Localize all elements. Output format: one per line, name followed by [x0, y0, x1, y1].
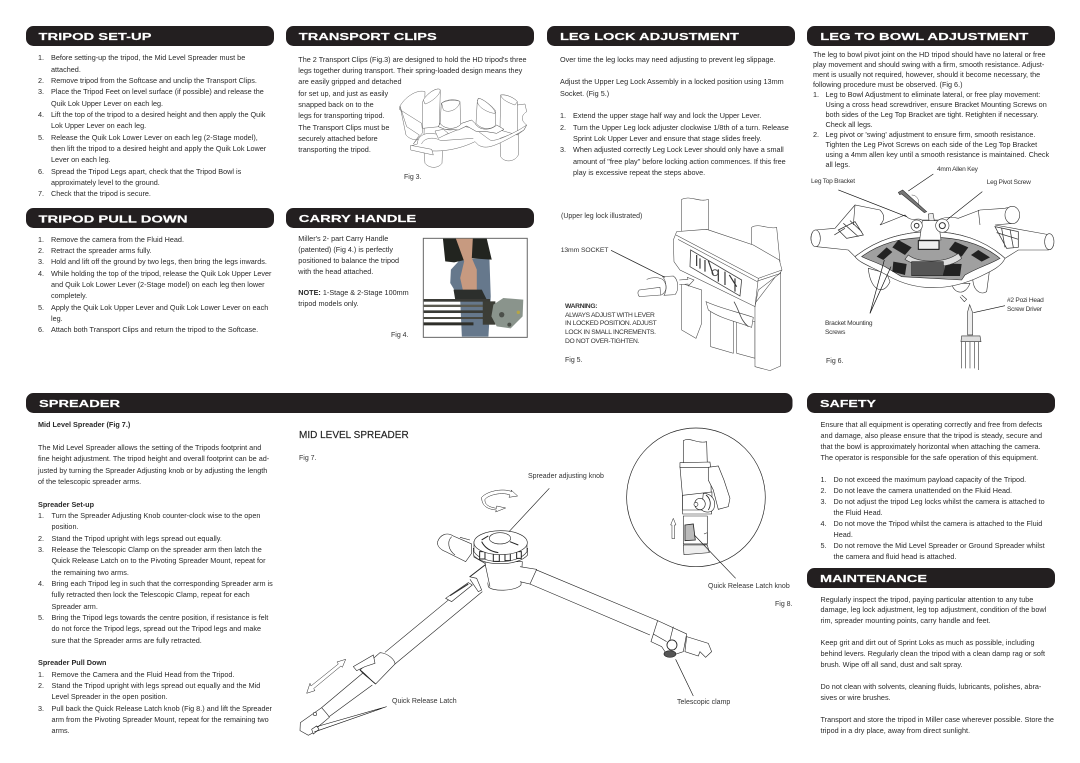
text block: leg lock adjustment steps: Socket. (Fig 5.) [560, 89, 609, 98]
text block: spreader instructions: Stand the Tripod upright with legs spread out equally. [52, 534, 222, 543]
text block: leg lock adjustment steps: When adjusted correctly Leg Lock Lever should only have a small [573, 145, 784, 154]
label: bracket mounting screws: Bracket Mounting [825, 320, 872, 326]
text block: tripod set-up steps: Place the Tripod Feet on level surface (if possible) and release the [51, 87, 264, 96]
text block: leg to bowl adjustment steps: following procedure must be observed. (Fig 6.) [813, 80, 963, 89]
text block: leg lock adjustment steps: amount of "free play" before locking action commences. If this free [573, 157, 786, 166]
text block: spreader instructions: Spreader arm. [52, 602, 98, 611]
text block: spreader instructions: 2. [38, 681, 44, 690]
text block: maintenance instructions: sives or wire brushes. [820, 693, 891, 702]
text block: tripod set-up steps: 6. [38, 167, 44, 176]
text block: tripod set-up steps: 1. [38, 53, 44, 62]
text block: tripod pull down steps: and Quik Lok Lower Lever (2-Stage model) on each leg then lower [51, 280, 265, 289]
text block: safety instructions: the camera and fluid head is attached. [834, 552, 956, 561]
text block: carry handle description: with the head attached. [298, 267, 373, 276]
heading: mid level spreader diagram title: MID LEVEL SPREADER [299, 430, 409, 440]
text block: maintenance instructions: Do not clean with solvents, cleaning fluids, lubricants, polishes, abra- [820, 682, 1041, 691]
label: 13mm socket: 13mm SOCKET [561, 247, 608, 254]
callout: warning: WARNING: [565, 303, 597, 310]
text block: spreader instructions: 2. [38, 534, 44, 543]
text block: leg lock adjustment steps: Turn the Upper Leg lock adjuster clockwise 1/8th of a turn. Release [573, 123, 789, 132]
text block: tripod pull down steps: completely. [51, 291, 87, 300]
text block: tripod set-up steps: Remove tripod from the Softcase and unclip the Transport Clips. [51, 76, 257, 85]
label: fig 6: Fig 6. [826, 358, 844, 365]
text block: spreader instructions [38, 420, 273, 735]
text block: maintenance instructions: Regularly inspect the tripod, paying particular attention to any tube [820, 594, 1033, 604]
text block: maintenance instructions: damage, leg lock adjustment, leg top adjustment, condition of the bowl [820, 605, 1046, 614]
text block: tripod set-up steps: 5. [38, 133, 44, 142]
text block: tripod set-up steps: Spread the Tripod Legs apart, check that the Tripod Bowl is [51, 167, 241, 176]
text block: spreader instructions: position. [52, 522, 79, 531]
text block: tripod pull down steps: Hold and lift off the ground by two legs, then bring the legs inwards. [51, 257, 267, 266]
label: fig 8: Fig 8. [775, 600, 793, 608]
text block: tripod pull down steps: 6. [38, 325, 44, 334]
text block: carry handle description [298, 234, 409, 308]
text block: tripod set-up steps: Lok Upper Lever on each leg. [51, 121, 146, 130]
label: bracket mounting screws: Screws [825, 328, 845, 336]
text block: tripod pull down steps: leg. [51, 314, 63, 323]
label: leg pivot screw: Leg Pivot Screw [987, 178, 1031, 186]
text block: leg to bowl adjustment steps: both sides of the Leg Top Bracket are tight. Retighten if necessary. [826, 110, 1038, 119]
heading: safety [807, 393, 1055, 413]
heading: carry handle [286, 208, 534, 228]
text block: tripod set-up steps: Check that the tripod is secure. [51, 189, 151, 198]
text block: transport clips description: The 2 Transport Clips (Fig.3) are designed to hold the HD tripod's three [298, 55, 527, 64]
text block: leg to bowl adjustment steps: Leg to Bowl Adjustment to eliminate lateral, or free play movement: [826, 90, 1040, 99]
text block: transport clips description [298, 55, 527, 154]
text block: tripod set-up steps: 7. [38, 189, 44, 198]
text block: leg lock adjustment steps: Extend the upper stage half way and lock the Upper Lever. [573, 111, 761, 120]
text block: spreader instructions: Spreader Pull Down [38, 658, 106, 667]
text block: transport clips description: are easily gripped and detached [298, 77, 401, 86]
heading: tripod set-up [26, 26, 274, 46]
text block: tripod pull down steps: Retract the spreader arms fully. [51, 246, 152, 255]
text block: spreader instructions: arm from the Pivoting Spreader Mount, repeat for the remaining two [52, 715, 269, 724]
text block: leg lock adjustment steps: 3. [560, 145, 566, 154]
heading: tripod set-up: TRIPOD SET-UP [38, 32, 151, 42]
text block: tripod set-up steps [38, 53, 266, 198]
text block: leg to bowl adjustment steps: using a 4mm allen key until a smooth resistance is maintained. Check [826, 150, 1049, 159]
label: fig 7: Fig 7. [299, 454, 317, 462]
text block: leg to bowl adjustment steps: The leg to bowl pivot joint on the HD tripod should have no lateral or free [813, 50, 1046, 59]
text block: safety instructions: and damage, also please ensure that the tripod is steady, secure and [820, 431, 1042, 440]
text block: transport clips description: snapped back on to the [298, 100, 374, 109]
text block: maintenance instructions: tripod in a dry place, away from direct sunlight. [820, 726, 970, 735]
text block: spreader instructions: justed by turning the Spreader Adjusting knob or by adjusting the length [38, 466, 267, 475]
text block: tripod set-up steps: Before setting-up the tripod, the Mid Level Spreader must be [51, 53, 245, 62]
callout: warning [565, 303, 657, 345]
text block: spreader instructions: 4. [38, 579, 44, 588]
text block: leg lock adjustment steps: Over time the leg locks may need adjusting to prevent leg slippage. [560, 55, 776, 64]
label: fig 3: Fig 3. [404, 174, 422, 180]
heading: transport clips [286, 26, 534, 46]
text block: spreader instructions: 3. [38, 545, 44, 554]
text block: tripod set-up steps: 2. [38, 76, 44, 85]
text block: transport clips description: securely attached before [298, 134, 378, 143]
label: fig 4: Fig 4. [391, 332, 409, 338]
text block: spreader instructions: fully retracted then lock the Telescopic Clamp, repeat for each [52, 590, 250, 599]
text block: spreader instructions: Turn the Spreader Adjusting Knob counter-clock wise to the open [52, 511, 260, 520]
text block: safety instructions: 3. [820, 497, 827, 506]
text block: maintenance instructions: brush. Wipe off all sand, dust and salt spray. [820, 660, 962, 669]
text block: safety instructions: that the bowl is approximately horizontal when attaching the camera. [820, 442, 1041, 451]
text block: leg to bowl adjustment steps: 1. [813, 90, 819, 99]
text block: tripod set-up steps: then lift the tripod to a desired height and apply the Quik Lok Lower [51, 144, 266, 153]
text block: safety instructions: the Fluid Head. [834, 508, 883, 517]
text block: leg to bowl adjustment steps: 2. [813, 130, 819, 139]
text block: leg to bowl adjustment steps: ment is usually not required, however, should it become necessary, the [813, 70, 1040, 79]
text block: maintenance instructions: Keep grit and dirt out of Sprint Loks as much as possible, including [820, 638, 1034, 647]
label: pozi head screw driver [1007, 296, 1044, 312]
text block: maintenance instructions: behind levers. Regularly clean the tripod with a clean damp rag or soft [820, 649, 1045, 658]
photo: person carrying tripod [422, 238, 528, 338]
callout: warning: IN LOCKED POSITION. ADJUST [565, 320, 656, 327]
text block: tripod set-up steps: 3. [38, 87, 44, 96]
text block: spreader instructions: do not force the Tripod legs, spread out the Tripod legs and make [52, 624, 261, 633]
text block: tripod pull down steps: Remove the camera from the Fluid Head. [51, 235, 184, 244]
text block: tripod set-up steps: approximately level to the ground. [51, 178, 160, 187]
text block: maintenance instructions [820, 594, 1054, 735]
text block: leg to bowl adjustment steps: all legs. [826, 160, 850, 169]
text block: carry handle description: (patented) (Fig 4.) is perfectly [298, 245, 393, 254]
heading: carry handle: CARRY HANDLE [298, 214, 416, 224]
text block: transport clips description: transporting the tripod. [298, 145, 371, 154]
text block: spreader instructions: fine height adjustment. The tripod height and overall footprint can be ad- [38, 454, 269, 463]
heading: maintenance [807, 568, 1055, 588]
text block: safety instructions: Head. [834, 530, 853, 539]
text block: leg lock adjustment steps: Adjust the Upper Leg Lock Assembly in a locked position using 13mm [560, 77, 784, 86]
text block: carry handle description: Miller's 2- part Carry Handle [298, 234, 388, 243]
text block: safety instructions: Do not exceed the maximum payload capacity of the Tripod. [834, 475, 1026, 484]
text block: safety instructions: Do not adjust the tripod Leg locks whilst the camera is attached to [834, 497, 1045, 506]
label: leg top bracket: Leg Top Bracket [811, 178, 855, 185]
text block: safety instructions: The operator is responsible for the safe operation of this equipment. [820, 453, 1038, 462]
text block: leg to bowl adjustment steps: Tighten the Leg Pivot Screws on each side of the Leg Top Bracket [826, 140, 1037, 149]
text block: spreader instructions: Spreader Set-up [38, 500, 94, 509]
text block: spreader instructions: Stand the Tripod upright with legs spread out equally and the Mid [52, 681, 260, 690]
text block: spreader instructions: 1. [38, 670, 44, 679]
heading: spreader: SPREADER [38, 399, 121, 410]
heading: leg lock adjustment: LEG LOCK ADJUSTMENT [560, 32, 739, 42]
text block: safety instructions: 1. [820, 475, 827, 484]
text block: leg to bowl adjustment steps: Leg pivot or 'swing' adjustment to ensure firm, smooth resistance. [826, 130, 1035, 139]
text block: spreader instructions: Mid Level Spreader (Fig 7.) [38, 420, 130, 429]
label: quick release latch knob: Quick Release Latch knob [708, 583, 790, 590]
text block: tripod set-up steps: 4. [38, 110, 44, 119]
text block: tripod set-up steps: attached. [51, 65, 81, 74]
heading: leg to bowl adjustment: LEG TO BOWL ADJUSTMENT [820, 32, 1028, 42]
label: spreader adjusting knob: Spreader adjusting knob [528, 472, 604, 480]
text block: safety instructions: Do not remove the Mid Level Spreader or Ground Spreader whilst [834, 541, 1045, 550]
text block: spreader instructions: Remove the Camera and the Fluid Head from the Tripod. [52, 670, 234, 679]
text block: leg to bowl adjustment steps: play movement and should swing with a firm, smooth resistance. Adjust- [813, 60, 1044, 69]
text block: leg lock adjustment steps [560, 55, 789, 177]
callout: warning: DO NOT OVER-TIGHTEN. [565, 338, 639, 345]
text block: tripod pull down steps: 1. [38, 235, 44, 244]
text block: spreader instructions: The Mid Level Spreader allows the setting of the Tripods footprint and [38, 443, 261, 452]
text block: spreader instructions: the remaining two arms. [52, 568, 129, 577]
heading: tripod pull down [26, 208, 274, 228]
text block: maintenance instructions: rim, spreader mounting points, carry handle and feet. [820, 616, 991, 625]
text block: safety instructions: 4. [820, 519, 827, 528]
text block: maintenance instructions: Transport and store the tripod in Miller case wherever possible. Store the [820, 715, 1054, 724]
text block: transport clips description: The Transport Clips must be [298, 123, 389, 132]
text block: tripod pull down steps [38, 235, 272, 334]
heading: leg lock adjustment [547, 26, 795, 46]
text block: carry handle description: NOTE: 1-Stage & 2-Stage 100mm [298, 288, 409, 297]
heading: maintenance: MAINTENANCE [820, 574, 927, 584]
text block: tripod pull down steps: While holding the top of the tripod, release the Quik Lok Upper Lever [51, 269, 271, 278]
text block: spreader instructions: Bring the Tripod legs towards the centre position, if resistance is felt [52, 613, 268, 622]
text block: tripod set-up steps: Lever on each leg. [51, 155, 111, 164]
heading: tripod pull down: TRIPOD PULL DOWN [38, 214, 187, 226]
heading: leg to bowl adjustment [807, 26, 1055, 46]
text block: leg lock adjustment steps: 2. [560, 123, 566, 132]
text block: leg lock adjustment steps: play is excessive repeat the steps above. [573, 168, 705, 177]
text block: transport clips description: for set up, and just as easily [298, 89, 388, 98]
text block: spreader instructions: 3. [38, 704, 44, 713]
text block: carry handle description: positioned to balance the tripod [298, 256, 399, 265]
label: bracket mounting screws [825, 320, 872, 336]
text block: spreader instructions: sure that the Spreader arms are fully retracted. [52, 636, 202, 645]
text block: spreader instructions: 5. [38, 613, 44, 622]
text block: transport clips description: legs together during transport. Their spring-loaded design means they [298, 66, 522, 75]
text block: spreader instructions: of the telescopic spreader arms. [38, 477, 141, 486]
text block: tripod pull down steps: 5. [38, 303, 44, 312]
text block: leg to bowl adjustment steps: Using a cross head screwdriver, ensure Bracket Mounting Screws on [826, 100, 1047, 109]
text block: spreader instructions: Pull back the Quick Release Latch knob (Fig 8.) and lift the Spreader [52, 704, 272, 713]
callout: warning: LOCK IN SMALL INCREMENTS. [565, 329, 656, 336]
text block: tripod set-up steps: Release the Quik Lok Lower Lever on each leg (2-Stage model), [51, 133, 258, 142]
text block: spreader instructions: arms. [52, 726, 70, 735]
text block: safety instructions: 2. [820, 486, 827, 495]
label: fig 5: Fig 5. [565, 356, 583, 364]
text block: carry handle description: tripod models only. [298, 299, 359, 308]
text block: safety instructions: 5. [820, 541, 827, 550]
label: 4mm allen key: 4mm Allen Key [937, 166, 978, 172]
text block: leg to bowl adjustment steps: Check all legs. [826, 120, 873, 129]
text block: safety instructions: Do not move the Tripod whilst the camera is attached to the Fluid [834, 519, 1042, 528]
text block: tripod pull down steps: Apply the Quik Lok Upper Lever and Quik Lok Lower Lever on each [51, 303, 268, 312]
text block: tripod set-up steps: Lift the top of the tripod to a desired height and then apply the Quik [51, 110, 265, 119]
label: upper leg lock illustrated: (Upper leg lock illustrated) [561, 212, 642, 220]
heading: safety: SAFETY [820, 399, 876, 410]
text block: spreader instructions: 1. [38, 511, 44, 520]
text block: spreader instructions: Release the Telescopic Clamp on the spreader arm then latch the [52, 545, 262, 554]
heading: transport clips: TRANSPORT CLIPS [298, 32, 437, 43]
text block: leg to bowl adjustment steps [813, 50, 1050, 169]
heading: spreader [26, 393, 792, 413]
text block: safety instructions [820, 420, 1045, 561]
label: quick release latch: Quick Release Latch [392, 698, 457, 704]
text block: tripod pull down steps: 4. [38, 269, 44, 278]
text block: tripod pull down steps: 3. [38, 257, 44, 266]
text block: leg lock adjustment steps: Sprint Lok Upper Lever and ensure that stage slides freely. [573, 134, 761, 143]
callout: warning: ALWAYS ADJUST WITH LEVER [565, 312, 655, 319]
label: pozi head screw driver: Screw Driver [1007, 306, 1042, 312]
text block: spreader instructions: Level Spreader in the open position. [52, 692, 168, 701]
text block: tripod pull down steps: 2. [38, 246, 44, 255]
text block: leg lock adjustment steps: 1. [560, 111, 566, 120]
text block: safety instructions: Ensure that all equipment is operating correctly and free from defects [820, 420, 1042, 429]
text block: tripod set-up steps: Quik Lok Upper Lever on each leg. [51, 99, 163, 108]
text block: spreader instructions: Bring each Tripod leg in such that the corresponding Spreader arm is [52, 579, 273, 588]
text block: transport clips description: legs for transporting tripod. [298, 111, 385, 120]
label: pozi head screw driver: #2 Pozi Head [1007, 296, 1044, 304]
label: telescopic clamp: Telescopic clamp [677, 698, 730, 706]
text block: spreader instructions: Quick Release Latch on to the Pivoting Spreader Mount, repeat for [52, 556, 266, 565]
text block: safety instructions: Do not leave the camera unattended on the Fluid Head. [834, 486, 1012, 495]
text block: tripod pull down steps: Attach both Transport Clips and return the tripod to the Softcase. [51, 325, 258, 334]
